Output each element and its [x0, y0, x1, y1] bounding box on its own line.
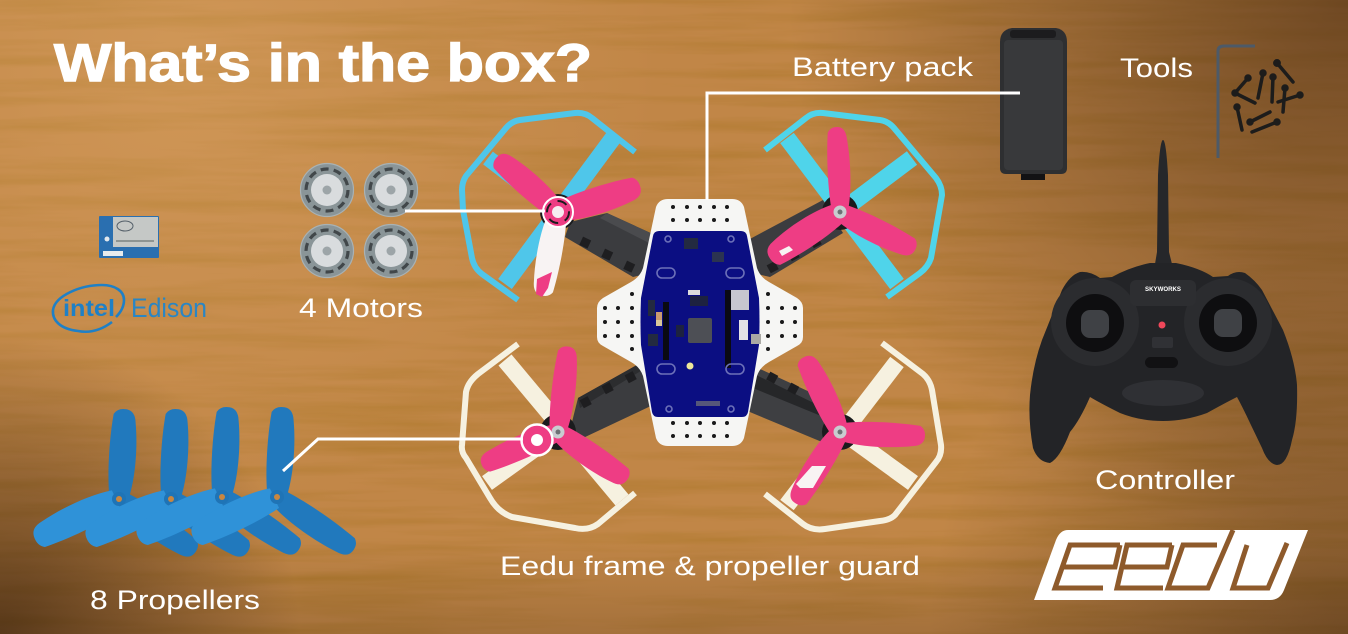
- motor 4: [364, 224, 418, 278]
- propeller 2: [80, 408, 254, 563]
- motor 3: [300, 224, 354, 278]
- propeller tip: top left pink: [536, 272, 552, 297]
- arm: top left: [565, 213, 655, 277]
- guard: top left blue: [462, 113, 635, 300]
- pcb silver parts: [656, 290, 761, 406]
- hub: bottom right silver: [834, 426, 846, 438]
- propeller: top left: [489, 148, 644, 298]
- switch: [1145, 357, 1178, 368]
- hub base: top left: [540, 194, 576, 230]
- pcb headers: [648, 238, 731, 368]
- hub: top right silver: [834, 206, 846, 218]
- slot: [1152, 337, 1173, 348]
- propeller: bottom left: [477, 345, 634, 491]
- hub base: bottom left: [540, 414, 576, 450]
- logo: intel edison: Edison: [131, 293, 207, 323]
- hub: bottom left washer: [522, 424, 552, 456]
- icon: battery pack: [1000, 28, 1067, 180]
- circuit board: [640, 231, 761, 417]
- label: controller: Controller: [1095, 465, 1235, 495]
- lower oval: [1122, 380, 1204, 406]
- hub base: bottom right: [822, 414, 858, 450]
- hub: bottom left silver: [552, 426, 564, 438]
- leader line: propellers: [283, 439, 523, 471]
- label: tools: Tools: [1120, 53, 1193, 83]
- power led: [1158, 322, 1166, 328]
- right stick: [1184, 278, 1272, 366]
- frame plate: white: [597, 199, 803, 446]
- motor 1: [300, 163, 354, 217]
- icon: allen key: [1218, 46, 1255, 158]
- arm: bottom right: [745, 362, 830, 442]
- controller body: [1029, 263, 1297, 465]
- leader line: motors: [405, 210, 545, 212]
- drone assembly: [462, 113, 942, 529]
- icon: screws: [1233, 61, 1302, 132]
- guard: top right blue: [765, 113, 942, 297]
- propeller: bottom right: [784, 351, 926, 509]
- motors group: [300, 163, 418, 278]
- pcb pads: [657, 236, 744, 412]
- propeller: top right: [762, 127, 920, 269]
- logo: intel edison: [53, 285, 207, 332]
- logo: eedu: [1034, 530, 1308, 600]
- icon: intel edison board: [99, 216, 159, 258]
- propeller mark: bottom right white: [796, 466, 826, 488]
- propeller 3: [131, 406, 305, 561]
- label: frame and guard: Eedu frame & propeller guard: [500, 551, 920, 581]
- logo: intel edison: intel: [63, 295, 115, 321]
- guard: bottom left cream: [462, 344, 635, 529]
- title: What’s in the box?: [54, 34, 592, 93]
- propeller mark: top right white: [779, 246, 793, 256]
- label: 4 motors: 4 Motors: [299, 293, 423, 323]
- frame mounting holes: [603, 205, 797, 438]
- label: battery pack: Battery pack: [792, 52, 974, 82]
- brand plate: [1130, 280, 1196, 306]
- hub base: top right: [822, 194, 858, 230]
- arm: bottom left: [570, 365, 655, 438]
- antenna: [1155, 140, 1172, 264]
- guard: bottom right cream: [765, 343, 941, 529]
- motor 2: [364, 163, 418, 217]
- propeller 4: [186, 406, 360, 561]
- icon: controller: [1029, 140, 1297, 465]
- leader line: battery: [707, 93, 1020, 200]
- left stick: [1051, 278, 1139, 366]
- hub: top left ring: [543, 197, 573, 227]
- label: 8 propellers: 8 Propellers: [90, 585, 260, 615]
- pcb chip: [688, 318, 712, 343]
- propellers group: [28, 406, 360, 563]
- propeller 1: [28, 408, 202, 563]
- brand text: SKYWORKS: [1145, 286, 1182, 293]
- arm: top right: [748, 200, 843, 277]
